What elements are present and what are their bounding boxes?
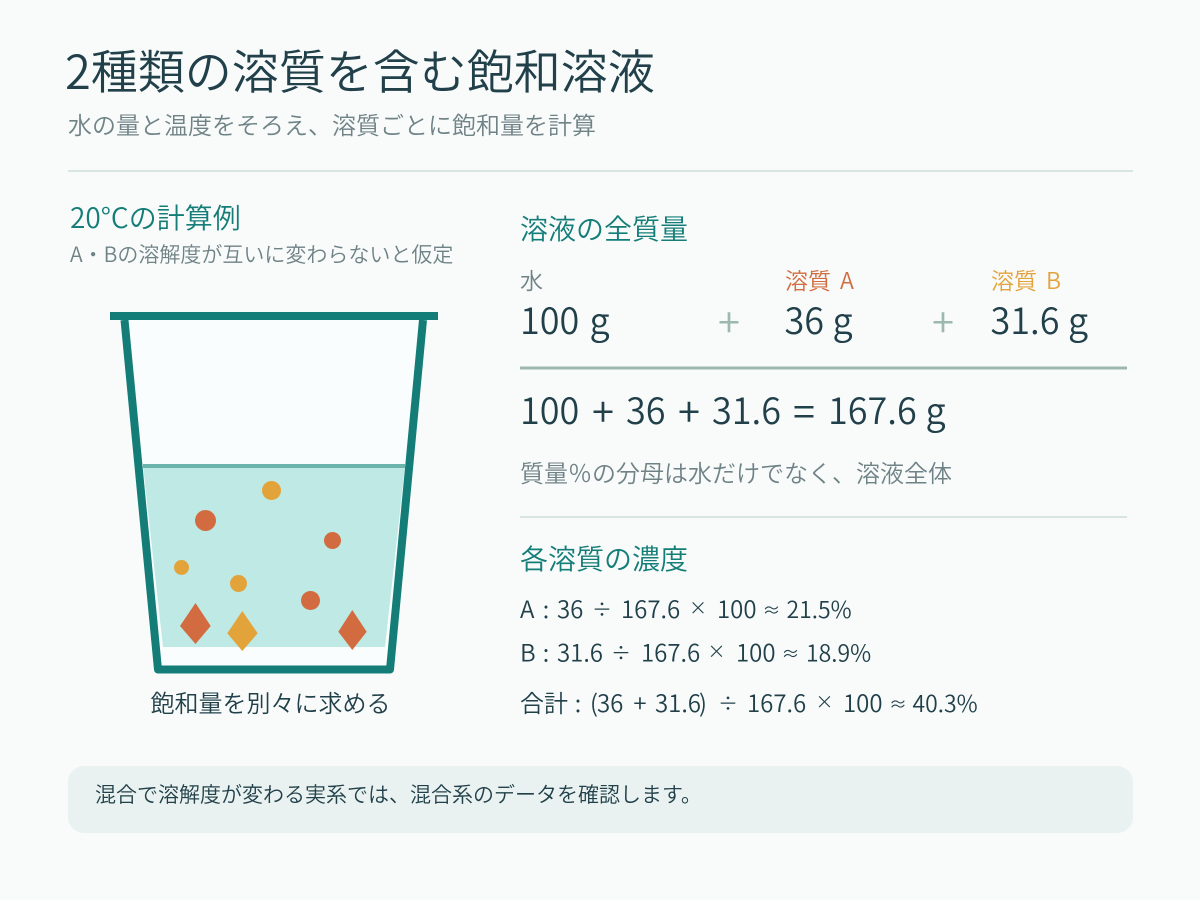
formula: total: ≈ <box>889 691 907 717</box>
equation: + <box>678 380 700 438</box>
formula: total: 40.3% <box>912 685 978 719</box>
formula: B: 31.6 <box>557 634 603 668</box>
formula: A: 21.5% <box>786 591 852 625</box>
formula: total: × <box>816 689 834 715</box>
panel: concentration <box>520 538 978 719</box>
formula: B: : <box>543 634 549 668</box>
formula: total: 31.6 <box>655 684 701 719</box>
glass interior <box>124 320 424 669</box>
formula: total: : <box>575 684 581 719</box>
subtitle: 水の量と温度をそろえ、溶質ごとに飽和量を計算 <box>68 106 596 141</box>
formula: B: B <box>520 634 536 668</box>
item: solute B <box>990 262 1088 345</box>
item: solute A: g <box>832 293 853 345</box>
plus sign: + <box>718 291 740 349</box>
formula: A: 36 <box>557 590 583 625</box>
formula: B: × <box>708 638 726 664</box>
dissolved particles <box>174 481 341 610</box>
item: solute B: B <box>1046 262 1061 296</box>
equation: 100 <box>520 383 579 435</box>
formula: A: ÷ <box>592 594 612 623</box>
solution surface <box>143 464 405 468</box>
panel: total mass <box>520 208 1127 489</box>
solution <box>143 466 405 647</box>
undissolved crystals <box>180 603 367 651</box>
equation: 36 <box>626 383 666 435</box>
formula: A: ≈ <box>762 597 780 623</box>
item: solute A <box>784 262 854 345</box>
item: water: 水 <box>520 262 543 296</box>
denominator note: 質量％の分母は水だけでなく、溶液全体 <box>520 454 952 489</box>
equation: 167.6 <box>828 383 917 435</box>
formula: B: ≈ <box>782 640 800 666</box>
rim <box>110 312 438 320</box>
formula: A: 100 <box>717 590 757 625</box>
glass outline <box>124 320 423 670</box>
beaker caption: 飽和量を別々に求める <box>150 684 390 719</box>
item: solute A: 溶質 <box>785 262 831 296</box>
item: water <box>520 262 610 345</box>
formula: B: 167.6 <box>641 634 700 668</box>
item: solute A: 36 <box>784 293 824 345</box>
formula: A: A <box>520 590 535 625</box>
panel: 20°C example <box>70 197 453 719</box>
formula: B: 18.9% <box>806 634 871 668</box>
formula: A: × <box>689 595 707 621</box>
formula: total: ) <box>699 684 707 719</box>
item: water: 100 <box>520 293 579 345</box>
item: solute A: A <box>840 262 854 296</box>
equation: 31.6 <box>712 383 781 435</box>
heading: total mass: 溶液の全質量 <box>520 208 688 248</box>
item: water: g <box>590 293 610 345</box>
item: solute B: 溶質 <box>991 262 1037 296</box>
title: 2種類の溶質を含む飽和溶液 <box>65 34 655 103</box>
heading: concentration: 各溶質の濃度 <box>520 538 688 578</box>
formula: total: 167.6 <box>747 684 806 719</box>
item: solute B: 31.6 <box>990 293 1059 345</box>
heading: example: 20°Cの計算例 <box>70 197 241 237</box>
formula: total: 100 <box>843 684 883 719</box>
callout: 混合で溶解度が変わる実系では、混合系のデータを確認します。 <box>95 779 702 809</box>
formula: total: 合計 <box>520 684 568 719</box>
equation: = <box>793 380 815 438</box>
formula: B: ÷ <box>611 637 631 666</box>
item: solute B: g <box>1068 293 1088 345</box>
equation: g <box>926 383 946 435</box>
formula: total: ÷ <box>718 688 738 717</box>
formula: A: : <box>543 590 549 625</box>
diagram: beaker <box>110 312 438 670</box>
formula: total: ( <box>590 684 598 719</box>
equation: + <box>592 380 614 438</box>
formula: total: 36 <box>597 684 623 719</box>
formula: total: + <box>633 684 647 719</box>
plus sign: + <box>932 291 954 349</box>
assumption note: A・Bの溶解度が互いに変わらないと仮定 <box>70 239 453 269</box>
formula: A: 167.6 <box>621 590 680 625</box>
formula: B: 100 <box>736 634 776 668</box>
callout <box>68 766 1133 833</box>
